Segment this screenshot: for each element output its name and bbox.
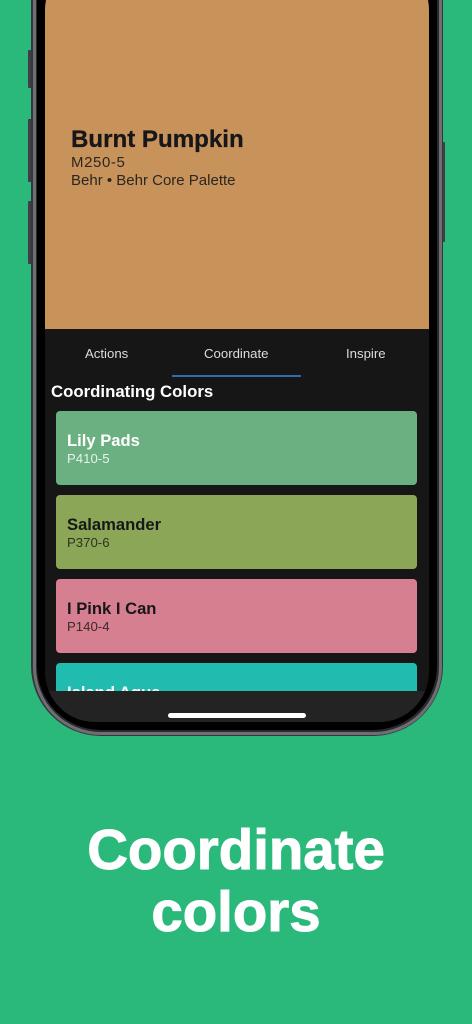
section heading: Coordinating Colors	[51, 382, 213, 401]
tab: actions: Actions	[85, 346, 128, 361]
headline	[87, 818, 385, 943]
color code: P410-5	[67, 451, 110, 466]
paint brand and palette: Behr • Behr Core Palette	[71, 172, 236, 189]
paint name: Burnt Pumpkin	[71, 126, 244, 153]
card: island aqua (clipped)	[56, 663, 417, 691]
headline: colors	[151, 880, 321, 943]
card: i pink i can	[56, 579, 417, 653]
color name: Lily Pads	[67, 431, 140, 450]
active tab underline	[172, 375, 301, 377]
color name: I Pink I Can	[67, 599, 156, 618]
paint code: M250-5	[71, 154, 125, 171]
bottom bar	[45, 691, 429, 722]
headline: Coordinate	[87, 818, 385, 881]
color code: P140-4	[67, 619, 110, 634]
card: salamander	[56, 495, 417, 569]
color name: Salamander	[67, 515, 161, 534]
color code: P370-6	[67, 535, 110, 550]
paint color swatch	[45, 0, 429, 329]
tab: coordinate: Coordinate	[204, 346, 269, 361]
card: lily pads	[56, 411, 417, 485]
tab: inspire: Inspire	[346, 346, 386, 361]
phone side buttons	[28, 50, 445, 264]
home indicator	[168, 713, 306, 718]
phone screen	[45, 0, 429, 722]
phone frame	[31, 0, 443, 736]
